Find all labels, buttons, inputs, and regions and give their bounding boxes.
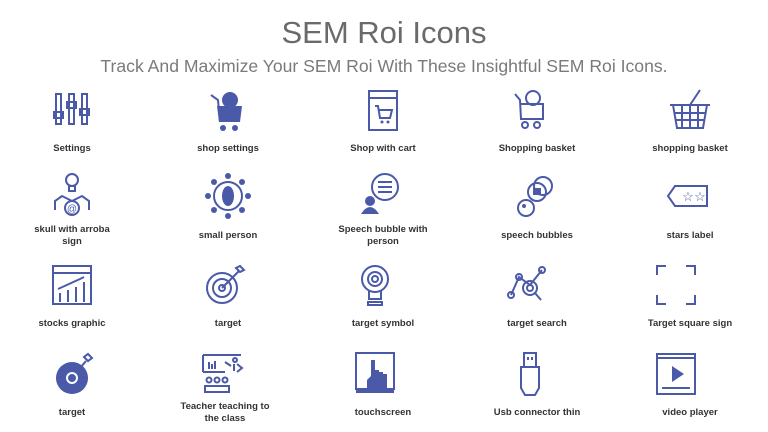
label: Usb connector thin: Usb connector thin: [494, 407, 580, 418]
icon: stocks graphic: [53, 266, 91, 304]
icon: teacher: [203, 355, 242, 392]
text: person: [367, 236, 399, 247]
label: Shop with cart: Shop with cart: [350, 143, 417, 154]
text: sign: [62, 236, 82, 247]
label: Speech bubble with person: Speech bubble with: [338, 224, 428, 235]
label: shop settings: shop settings: [197, 143, 259, 154]
text: the class: [205, 413, 245, 424]
label: video player: video player: [662, 407, 718, 418]
icon: basket: [670, 90, 710, 128]
icon: target symbol: [362, 266, 388, 305]
label: Shopping basket: Shopping basket: [499, 143, 576, 154]
label: Teacher teaching to the class: Teacher teaching to: [180, 401, 270, 412]
label: skull with arroba sign: skull with arroba: [34, 224, 110, 235]
label: touchscreen: touchscreen: [355, 407, 411, 418]
icon: usb: [521, 353, 539, 395]
label: Settings: Settings: [53, 143, 91, 154]
label: stocks graphic: stocks graphic: [38, 318, 106, 329]
icon: stars label: [668, 186, 707, 206]
label: target search: target search: [507, 318, 567, 329]
icon: touchscreen: [356, 353, 394, 393]
label: stars label: stars label: [666, 230, 714, 241]
icon: skull: @: [67, 204, 77, 215]
icon: shop settings: [211, 92, 242, 131]
icon: speech bubble with person: [361, 174, 398, 214]
label: target symbol: target symbol: [352, 318, 414, 329]
subtitle: Track And Maximize Your SEM Roi With These Insightful SEM Roi Icons.: [100, 56, 668, 76]
icon: shopping basket: [515, 91, 543, 128]
icon: skull: [55, 174, 89, 215]
icon: speech bubbles: [518, 177, 552, 216]
icon: small person: [205, 173, 251, 219]
icon: settings: [54, 94, 89, 124]
label: Target square sign: Target square sign: [648, 318, 732, 329]
icon: stars label: ☆: [682, 189, 694, 204]
icon: target: [207, 266, 244, 303]
icon: stars label: ☆: [694, 189, 706, 204]
label: target: target: [215, 318, 242, 329]
label: shopping basket: shopping basket: [652, 143, 729, 154]
icon: target filled: [56, 354, 92, 394]
label: small person: small person: [199, 230, 257, 241]
title: SEM Roi Icons: [281, 15, 487, 50]
icon: video player: [657, 354, 695, 394]
icon: shop with cart: [369, 91, 397, 130]
icon: target square: [657, 266, 695, 304]
label: target: target: [59, 407, 86, 418]
icon: target search: [508, 267, 545, 300]
label: speech bubbles: speech bubbles: [501, 230, 573, 241]
